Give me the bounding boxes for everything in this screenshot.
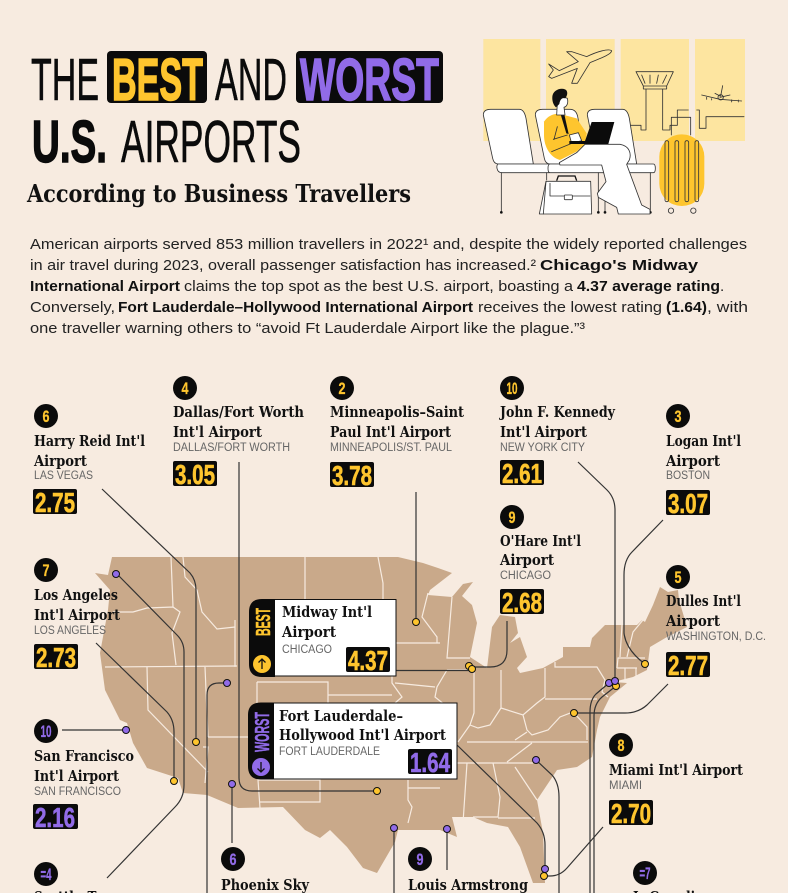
label: Dulles: WASHINGTON, D.C. <box>666 631 766 643</box>
intro paragraph: Conversely, <box>30 299 115 316</box>
label: San Francisco <box>33 719 134 833</box>
label: Los Angeles: Los Angeles <box>34 587 118 604</box>
intro paragraph: . <box>720 278 724 295</box>
label: Minneapolis: Minneapolis–Saint <box>330 404 464 421</box>
title <box>31 47 443 175</box>
label: Dulles <box>665 565 766 681</box>
card: best airport, Midway: 4.37 <box>348 645 388 676</box>
label: John F. Kennedy: 2.61 <box>502 458 542 489</box>
title: AIRPORTS <box>121 109 301 175</box>
label: Harry Reid <box>33 404 145 518</box>
label: Miami: MIAMI <box>609 780 642 792</box>
label: San Francisco: San Francisco <box>34 748 134 765</box>
intro paragraph: Fort Lauderdale–Hollywood International Airport <box>118 299 473 316</box>
label: O'Hare <box>499 505 581 618</box>
label: San Francisco: Int'l Airport <box>34 768 119 785</box>
label: Logan: 3.07 <box>668 488 708 519</box>
subtitle: According to Business Travellers <box>26 179 411 208</box>
label: Miami: Miami Int'l Airport <box>609 762 743 779</box>
label: Seattle (cropped): =4 <box>40 865 52 884</box>
illustration: traveller in airport lounge <box>483 39 745 214</box>
label: John F. Kennedy: 10 <box>506 379 518 398</box>
card: best airport, Midway: Airport <box>281 624 336 641</box>
label: Harry Reid: Harry Reid Int'l <box>34 433 145 450</box>
label: Dallas/Fort Worth: DALLAS/FORT WORTH <box>173 442 290 454</box>
intro paragraph: American airports served 853 million travellers in 2022¹ and, despite the widely reported challenges <box>30 236 747 253</box>
intro paragraph: in air travel during 2023, overall passenger satisfaction has increased.² <box>30 257 536 274</box>
label: Los Angeles: 7 <box>42 561 50 580</box>
label: Logan: Airport <box>665 453 720 470</box>
label: Phoenix (cropped) <box>221 847 310 893</box>
label: Dallas/Fort Worth: 3.05 <box>175 459 215 490</box>
intro paragraph: claims the top spot as the best U.S. airport, boasting a <box>184 278 574 295</box>
card: worst airport, Fort Lauderdale: Fort Lauderdale– <box>279 708 403 725</box>
card: best airport, Midway: CHICAGO <box>282 644 332 656</box>
label: O'Hare: 2.68 <box>502 587 542 618</box>
label: San Francisco: 2.16 <box>35 802 75 833</box>
label: John F. Kennedy: NEW YORK CITY <box>500 442 585 454</box>
title: U.S. <box>32 109 107 175</box>
label: Logan: BOSTON <box>666 470 710 482</box>
label: Louis Armstrong (cropped): 9 <box>416 850 424 869</box>
title: THE <box>31 47 99 113</box>
intro paragraph: 4.37 average rating <box>577 278 720 295</box>
label: Miami: 2.70 <box>611 798 651 829</box>
label: Harry Reid: LAS VEGAS <box>34 470 93 482</box>
label: Los Angeles: 2.73 <box>36 642 76 673</box>
intro paragraph: (1.64) <box>666 299 707 316</box>
label: Minneapolis: 2 <box>338 379 346 398</box>
intro paragraph: Chicago's Midway <box>540 257 699 274</box>
label: Seattle (cropped) <box>34 862 139 893</box>
label: Dulles: Airport <box>665 613 720 630</box>
card: best airport, Midway: BEST <box>253 608 275 636</box>
card: worst airport, Fort Lauderdale <box>248 702 457 780</box>
label: Harry Reid: Airport <box>33 453 87 470</box>
title: WORST <box>300 47 439 113</box>
label: Harry Reid: 2.75 <box>35 487 75 518</box>
label: Logan: Logan Int'l <box>666 433 741 450</box>
label: Dulles: 2.77 <box>668 650 708 681</box>
label: Minneapolis <box>330 376 464 491</box>
card: worst airport, Fort Lauderdale: FORT LAUDERDALE <box>279 746 380 758</box>
card: best airport, Midway: Midway Int'l <box>282 604 372 621</box>
label: LaGuardia (cropped): =7 <box>640 864 650 883</box>
label: Dulles: 5 <box>674 568 682 587</box>
intro paragraph: receives the lowest rating <box>478 299 662 316</box>
label: Logan <box>665 404 741 519</box>
connector lines <box>62 462 668 893</box>
label: Dallas/Fort Worth: 4 <box>182 379 189 398</box>
label: Louis Armstrong (cropped) <box>408 847 528 893</box>
label: Los Angeles: LOS ANGELES <box>34 625 106 637</box>
label: Dallas/Fort Worth <box>173 376 304 490</box>
airport dots <box>112 570 648 880</box>
intro paragraph: International Airport <box>30 278 180 295</box>
label: Miami <box>609 733 743 829</box>
title: AND <box>215 47 287 113</box>
label: O'Hare: CHICAGO <box>500 570 551 582</box>
label: O'Hare: Airport <box>499 552 554 569</box>
label: Miami: 8 <box>618 736 624 755</box>
label: O'Hare: 9 <box>508 508 516 527</box>
label: Los Angeles <box>34 558 120 673</box>
card: worst airport, Fort Lauderdale: Hollywood Int'l Airport <box>279 727 446 744</box>
label: LaGuardia (cropped) <box>633 861 703 893</box>
label: San Francisco: SAN FRANCISCO <box>34 786 121 798</box>
label: San Francisco: 10 <box>40 722 52 741</box>
label: Dallas/Fort Worth: Int'l Airport <box>173 424 262 441</box>
map of the United States <box>95 557 687 883</box>
label: Minneapolis: 3.78 <box>332 460 372 491</box>
label: John F. Kennedy <box>498 376 615 489</box>
intro paragraph <box>30 236 748 337</box>
label: Minneapolis: MINNEAPOLIS/ST. PAUL <box>330 442 453 454</box>
intro paragraph: , with <box>707 299 748 316</box>
card: best airport, Midway <box>249 599 396 677</box>
label: Los Angeles: Int'l Airport <box>34 607 120 624</box>
label: Dulles: Dulles Int'l <box>666 593 741 610</box>
label: Phoenix (cropped): 6 <box>230 850 236 869</box>
card: worst airport, Fort Lauderdale: 1.64 <box>410 747 450 778</box>
label: Harry Reid: 6 <box>42 407 50 426</box>
intro paragraph: one traveller warning others to “avoid Ft Lauderdale Airport like the plague.”³ <box>30 320 585 337</box>
label: Minneapolis: Paul Int'l Airport <box>330 424 451 441</box>
label: Dallas/Fort Worth: Dallas/Fort Worth <box>173 404 304 421</box>
label: John F. Kennedy: John F. Kennedy <box>498 404 615 421</box>
card: worst airport, Fort Lauderdale: WORST <box>252 712 274 752</box>
title: BEST <box>112 47 203 113</box>
label: John F. Kennedy: Int'l Airport <box>500 424 587 441</box>
label: O'Hare: O'Hare Int'l <box>500 533 581 550</box>
label: Logan: 3 <box>674 407 682 426</box>
